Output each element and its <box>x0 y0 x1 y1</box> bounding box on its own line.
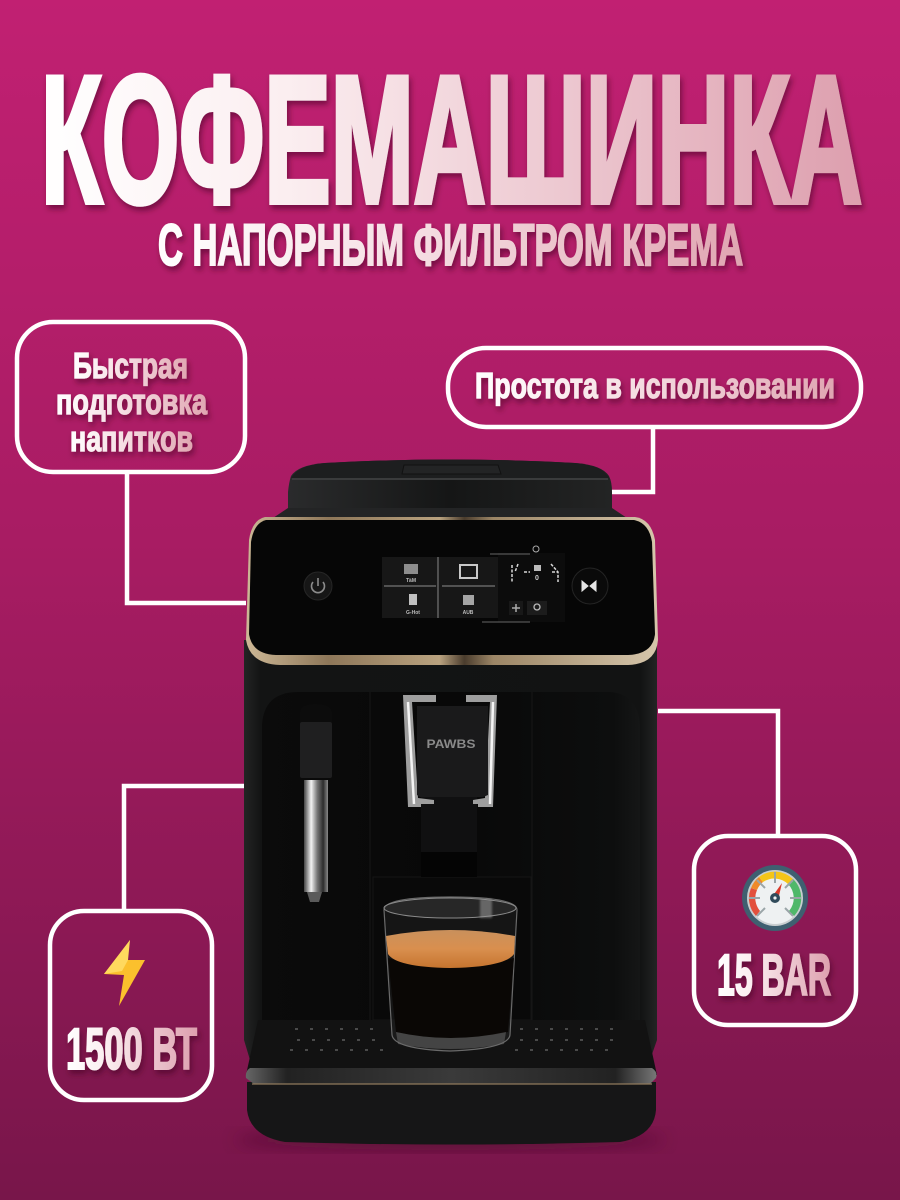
metal strip <box>246 1068 657 1084</box>
touch screen: AUB <box>463 610 474 616</box>
grill dots <box>290 1029 620 1050</box>
callout: fast drinks: напитков <box>70 418 193 459</box>
machine body <box>244 640 657 1060</box>
panel glass <box>249 520 655 655</box>
callout: fast drinks <box>17 322 245 472</box>
water tank lid <box>288 460 612 515</box>
coffee machine <box>235 460 665 1150</box>
connector lines <box>124 427 778 911</box>
control panel <box>246 517 658 665</box>
coffee recess <box>262 692 640 1020</box>
drip tray <box>246 1020 657 1075</box>
glass cup <box>384 897 517 1051</box>
coffee spout <box>403 695 497 807</box>
base <box>247 1082 656 1144</box>
callout: fast drinks: подготовка <box>56 381 208 422</box>
power button <box>304 572 332 600</box>
callout: power <box>50 911 212 1100</box>
callout: fast drinks: Быстрая <box>73 345 188 386</box>
touch screen: TäM <box>406 578 416 584</box>
machine shadow <box>235 1130 665 1150</box>
icon: lightning bolt <box>104 940 145 1006</box>
centre panel <box>370 692 532 1020</box>
panel frame gold <box>246 517 658 665</box>
steam wand <box>300 704 332 902</box>
brew button <box>572 568 608 604</box>
callout: power: 1500 ВТ <box>66 1017 197 1082</box>
lid details <box>270 460 630 520</box>
touch screen: 0 <box>535 575 539 582</box>
crema <box>386 930 515 968</box>
touch screen <box>382 546 565 622</box>
coffee <box>388 958 514 1038</box>
callout: ease of use <box>448 348 861 427</box>
icon: pressure gauge <box>742 865 808 931</box>
callout: pressure <box>694 836 856 1025</box>
coffee spout: PAWBS <box>426 737 476 751</box>
touch screen: G-Hot <box>406 610 420 616</box>
